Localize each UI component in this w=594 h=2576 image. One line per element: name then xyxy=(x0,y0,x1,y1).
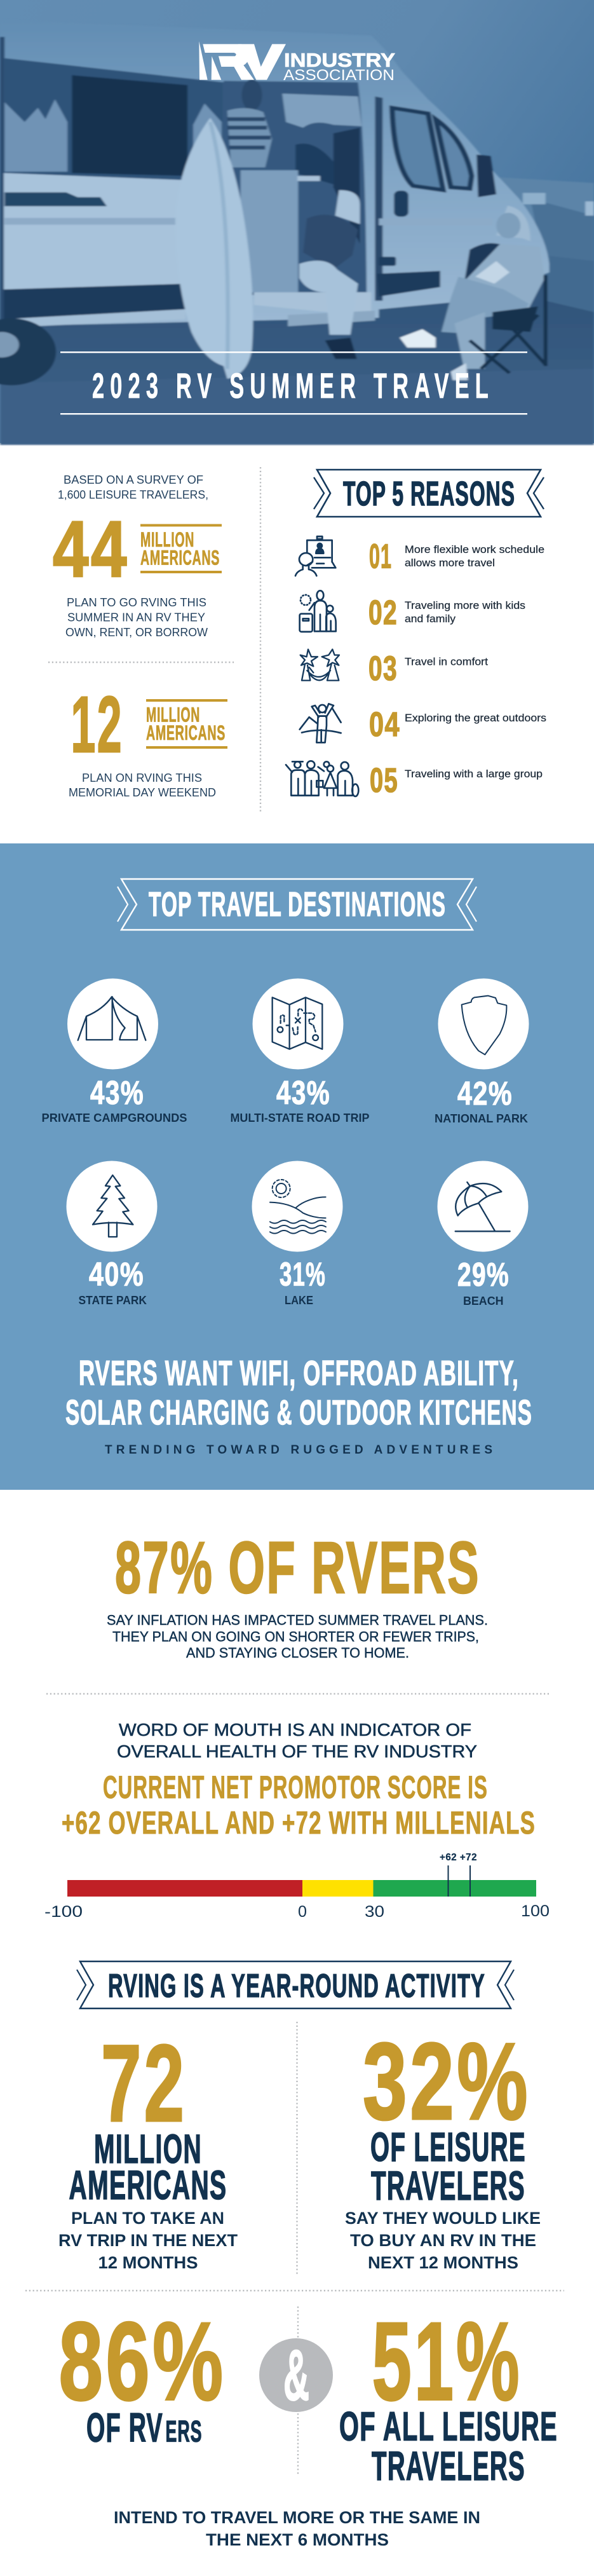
destination: beach xyxy=(437,1161,529,1307)
reason 02: and family xyxy=(405,613,456,625)
reason 04: 04 xyxy=(369,705,400,744)
destination: beach: 29% xyxy=(457,1257,510,1293)
text: plan to go RVing: OWN, RENT, OR BORROW xyxy=(65,626,208,639)
text: word of mouth: WORD OF MOUTH IS AN INDICATOR OF xyxy=(119,1720,471,1740)
stat: 86% of RVers: OF RV xyxy=(86,2405,163,2451)
icon: family xyxy=(300,590,336,632)
text: Memorial Day: PLAN ON RVING THIS xyxy=(82,772,202,784)
ribbon heading: year-round xyxy=(77,1961,514,2008)
text: plan to go RVing: PLAN TO GO RVING THIS xyxy=(67,596,206,609)
stat: 12 million Americans: AMERICANS xyxy=(146,721,226,744)
icon: hiker xyxy=(300,704,341,742)
stat: 72 million Americans: PLAN TO TAKE AN xyxy=(71,2209,224,2228)
ampersand badge: & xyxy=(283,2335,311,2415)
stat: 44 million Americans: AMERICANS xyxy=(140,547,220,569)
destination: lake: LAKE xyxy=(285,1294,313,1307)
ampersand badge xyxy=(259,2335,333,2415)
text: Memorial Day xyxy=(69,772,216,799)
photo: van, surfboard and travelers xyxy=(0,20,594,445)
destination: private campgrounds xyxy=(42,979,187,1124)
intro text xyxy=(58,474,208,501)
stat: 32% of leisure travelers xyxy=(345,2021,541,2272)
stat: 72 million Americans: AMERICANS xyxy=(69,2162,227,2208)
destination: beach: BEACH xyxy=(463,1295,503,1307)
gauge chart: -100 xyxy=(44,1903,83,1921)
panel: top travel destinations xyxy=(0,843,594,1490)
destination: national park: 42% xyxy=(457,1075,513,1112)
stat: 72 million Americans: 12 MONTHS xyxy=(98,2253,198,2272)
stat: 72 million Americans: MILLION xyxy=(94,2126,202,2172)
reason 02: 02 xyxy=(368,594,398,632)
panel: top 5 reasons xyxy=(286,470,546,800)
stat: 86% of RVers xyxy=(58,2300,226,2451)
text: inflation impact: AND STAYING CLOSER TO HOME. xyxy=(186,1645,409,1661)
reason 05: 05 xyxy=(370,761,398,800)
gauge chart: 100 xyxy=(521,1902,550,1920)
gauge chart xyxy=(44,1852,550,1921)
stat: 32% of leisure travelers: SAY THEY WOULD LIKE xyxy=(345,2209,541,2228)
text: Memorial Day: MEMORIAL DAY WEEKEND xyxy=(69,786,216,799)
destination: national park xyxy=(435,979,529,1125)
icon: group of travelers xyxy=(286,761,358,796)
stat: 51% of all leisure travelers xyxy=(339,2300,558,2489)
stat: 12 million Americans xyxy=(71,681,227,769)
stat: 86% of RVers: ERS xyxy=(165,2414,202,2448)
text: intend to travel: INTEND TO TRAVEL MORE OR THE SAME IN xyxy=(114,2508,480,2527)
text: intend to travel xyxy=(114,2508,480,2549)
icon: remote work xyxy=(295,536,335,576)
destination: state park xyxy=(66,1161,158,1307)
destination: lake xyxy=(252,1161,343,1307)
reason 02: Traveling more with kids xyxy=(405,600,525,611)
stat: 86% of RVers: 86% xyxy=(58,2300,226,2424)
text: word of mouth: OVERALL HEALTH OF THE RV INDUSTRY xyxy=(117,1741,477,1761)
reason 04: Exploring the great outdoors xyxy=(405,712,546,724)
reason 02 xyxy=(368,594,525,632)
icon: hammock xyxy=(300,650,339,681)
stat: 32% of leisure travelers: NEXT 12 MONTHS xyxy=(368,2253,518,2272)
text: plan to go RVing xyxy=(65,596,208,639)
destination: state park: STATE PARK xyxy=(79,1294,147,1307)
callout: RVers want: TRENDING TOWARD RUGGED ADVENTURES xyxy=(105,1443,492,1457)
stat: 44 million Americans: MILLION xyxy=(140,528,194,551)
intro text: 1,600 LEISURE TRAVELERS, xyxy=(58,488,208,501)
reason 05 xyxy=(370,761,543,800)
stat: 12 million Americans: MILLION xyxy=(146,703,200,726)
stat: 12 million Americans: 12 xyxy=(71,681,123,769)
text: plan to go RVing: SUMMER IN AN RV THEY xyxy=(67,611,205,624)
logo: RV Industry Association xyxy=(199,41,395,84)
destination: multi-state road trip xyxy=(230,979,370,1124)
callout: RVers want xyxy=(65,1353,532,1457)
ribbon heading: top 5 reasons xyxy=(314,470,544,517)
reason 05: Traveling with a large group xyxy=(405,768,543,780)
reason 01 xyxy=(369,538,544,576)
reason 03: 03 xyxy=(368,650,398,688)
text: intend to travel: THE NEXT 6 MONTHS xyxy=(206,2530,389,2549)
destination: multi-state road trip: 43% xyxy=(276,1075,330,1112)
gauge chart: +62 +72 xyxy=(440,1852,477,1863)
heading: net promoter score xyxy=(62,1769,536,1841)
gauge chart: 30 xyxy=(365,1903,384,1921)
stat: 72 million Americans: 72 xyxy=(101,2022,187,2144)
panel: year-round activity xyxy=(25,1961,564,2549)
panel: inflation stat xyxy=(107,1527,488,1661)
stat: 32% of leisure travelers: 32% xyxy=(363,2021,530,2143)
stat: 72 million Americans: RV TRIP IN THE NEXT xyxy=(58,2231,238,2250)
destination: national park: NATIONAL PARK xyxy=(435,1112,528,1125)
panel: survey totals xyxy=(48,474,234,799)
text: word of mouth xyxy=(117,1720,477,1761)
intro text: BASED ON A SURVEY OF xyxy=(64,474,203,486)
reason 03 xyxy=(368,650,488,688)
logo: RV Industry Association: ASSOCIATION xyxy=(283,67,395,84)
stat: 32% of leisure travelers: TO BUY AN RV IN THE xyxy=(350,2231,536,2250)
destination: private campgrounds: PRIVATE CAMPGROUNDS xyxy=(42,1112,187,1124)
text: inflation impact xyxy=(107,1612,488,1661)
stat: 44 million Americans xyxy=(53,505,222,594)
ribbon heading: destinations xyxy=(118,879,476,930)
text: inflation impact: THEY PLAN ON GOING ON SHORTER OR FEWER TRIPS, xyxy=(112,1628,479,1645)
reason 04 xyxy=(369,705,546,744)
destination: lake: 31% xyxy=(280,1256,326,1293)
gauge chart: 0 xyxy=(298,1903,307,1921)
reason 01: More flexible work schedule xyxy=(405,544,544,555)
reason 01: 01 xyxy=(369,538,392,576)
destination: private campgrounds: 43% xyxy=(90,1075,144,1112)
destination: state park: 40% xyxy=(89,1256,144,1293)
stat: 44 million Americans: 44 xyxy=(53,505,129,594)
reason 03: Travel in comfort xyxy=(405,656,488,667)
text: inflation impact: SAY INFLATION HAS IMPACTED SUMMER TRAVEL PLANS. xyxy=(107,1612,488,1628)
panel: hero photo xyxy=(0,0,594,445)
reason 01: allows more travel xyxy=(405,557,495,569)
destination: multi-state road trip: MULTI-STATE ROAD TRIP xyxy=(230,1112,370,1124)
panel: net promoter score xyxy=(44,1720,550,1921)
logo: RV Industry Association: INDUSTRY xyxy=(284,49,395,71)
stat: 72 million Americans xyxy=(58,2022,238,2272)
